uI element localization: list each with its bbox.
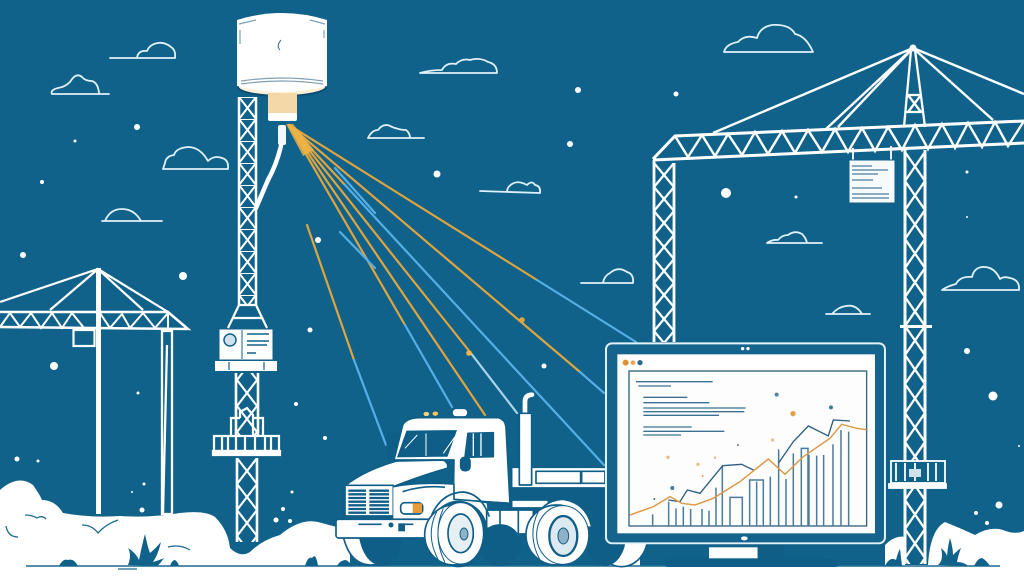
monitor <box>606 343 885 567</box>
text lines <box>636 382 746 435</box>
right platform <box>889 461 946 488</box>
tower platform <box>213 408 280 455</box>
bars <box>653 430 849 525</box>
left tower <box>213 97 280 542</box>
grass tuft <box>128 534 164 566</box>
signal beams <box>286 124 636 465</box>
wheel arch front <box>428 492 489 567</box>
fender <box>393 483 489 527</box>
bush centre <box>305 556 352 566</box>
orange trend line <box>630 424 867 515</box>
dark trend line <box>668 420 850 502</box>
scatter dots <box>653 393 833 500</box>
hanging sign <box>849 146 895 203</box>
headlight <box>401 503 423 514</box>
front left tyre <box>343 537 402 565</box>
truck <box>336 395 648 567</box>
monitor stand <box>665 543 838 567</box>
dark tyres <box>479 525 521 565</box>
bumper <box>336 519 432 538</box>
left crane column <box>162 331 172 514</box>
hood <box>344 460 448 517</box>
bush <box>59 560 179 566</box>
camera and button <box>741 347 750 540</box>
cab <box>394 418 510 503</box>
clouds <box>52 25 1019 314</box>
grass tuft right <box>938 538 990 566</box>
screen <box>617 354 875 533</box>
wheel arch rear <box>534 499 592 527</box>
front wheel <box>425 503 483 565</box>
right crane <box>653 44 1024 564</box>
left crane <box>0 268 188 514</box>
crane columns <box>654 163 674 342</box>
mirror <box>387 433 398 457</box>
snow ground <box>0 481 1024 576</box>
tower instrument panel <box>215 329 277 371</box>
rear tyre <box>585 507 648 567</box>
step boxes <box>487 500 548 534</box>
snow dots <box>14 87 1020 525</box>
lamp head <box>237 13 327 208</box>
crane stays <box>713 48 1024 133</box>
windshield <box>396 429 458 458</box>
exhaust stack <box>519 395 532 485</box>
crane jib truss <box>653 121 1024 160</box>
window dots <box>623 360 643 366</box>
grille <box>345 485 393 516</box>
rear wheel <box>526 505 589 565</box>
truck bed <box>510 467 607 510</box>
roof lights <box>423 408 468 417</box>
monitor bezel <box>606 343 885 543</box>
left crane cab <box>74 330 94 346</box>
chart frame <box>629 371 867 526</box>
door window <box>461 433 493 471</box>
